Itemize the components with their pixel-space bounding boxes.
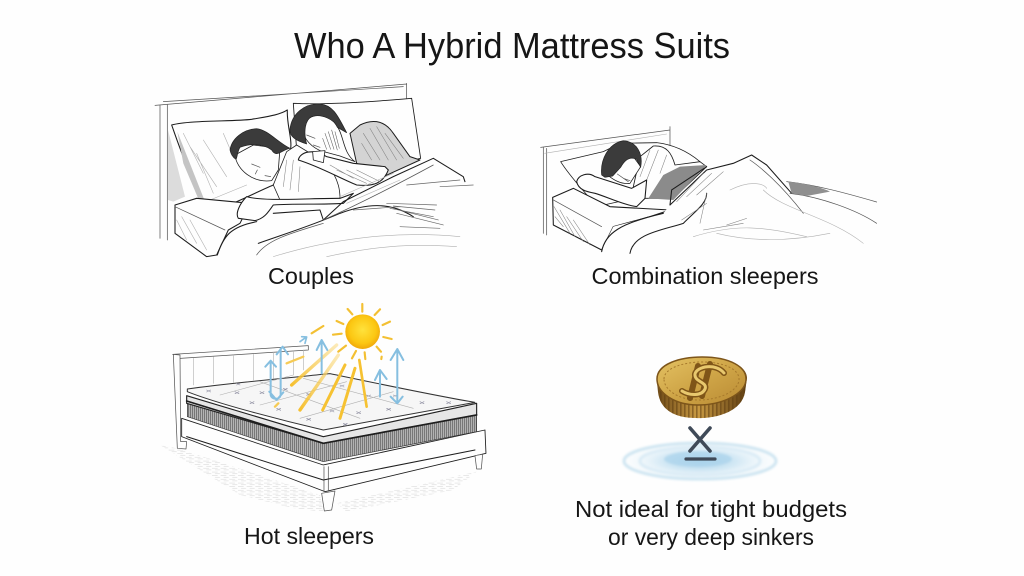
icon: cross mark with underline [686, 428, 715, 459]
label: not ideal for tight budgets or very deep sinkers [575, 496, 847, 550]
sun rays onto the mattress [275, 345, 367, 418]
label: not ideal for tight budgets or very deep sinkers: Not ideal for tight budgets [575, 496, 847, 522]
label: not ideal for tight budgets or very deep sinkers: or very deep sinkers [608, 524, 814, 550]
cooling arrows [265, 337, 403, 403]
dollar sign [682, 364, 724, 398]
illustration: hot sleepers mattress with sun and airflow arrows [160, 304, 486, 512]
label: combination sleepers: Combination sleepers [592, 263, 818, 289]
label: couples: Couples [268, 263, 354, 289]
title: Who A Hybrid Mattress Suits [294, 25, 730, 66]
icon: water ripples [616, 439, 784, 483]
sun [345, 314, 380, 349]
label: hot sleepers: Hot sleepers [244, 523, 374, 549]
illustration: couple sleeping in bed [155, 83, 477, 267]
illustration: combination sleeper in bed [541, 127, 877, 253]
icon: gold dollar coin [657, 357, 747, 418]
